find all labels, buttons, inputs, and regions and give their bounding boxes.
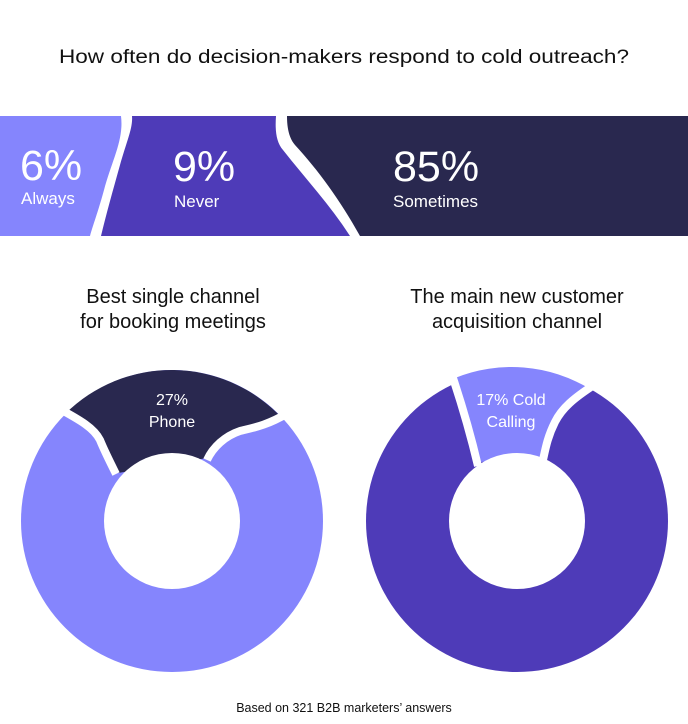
heading: main acquisition channel: acquisition channel xyxy=(432,311,602,333)
label: 85% sometimes: Sometimes xyxy=(393,192,478,211)
label: 17% cold calling: Calling xyxy=(487,414,535,431)
label: 85% sometimes: 85% xyxy=(393,143,479,191)
label: 27% phone: 27% xyxy=(156,392,188,409)
heading: best single channel: Best single channel xyxy=(86,286,260,308)
segment: cold calling 17% xyxy=(455,367,590,462)
heading: best single channel: for booking meetings xyxy=(80,311,266,333)
segment: never xyxy=(101,116,350,236)
label: 17% cold calling: 17% Cold xyxy=(476,392,546,409)
band chart: response frequency xyxy=(0,116,688,236)
donut chart: best channel xyxy=(21,370,323,672)
segment: always xyxy=(0,116,121,236)
donut chart: acquisition channel xyxy=(366,367,668,672)
footer note: Based on 321 B2B marketers’ answers xyxy=(236,701,452,715)
label: 17% cold calling xyxy=(476,392,546,431)
label: 9% never: 9% xyxy=(173,143,235,191)
segment: sometimes xyxy=(287,116,688,236)
label: 27% phone: Phone xyxy=(149,414,195,431)
segment: phone 27% xyxy=(65,370,282,473)
heading: main acquisition channel: The main new customer xyxy=(410,286,624,308)
label: 27% phone xyxy=(149,392,195,431)
title: How often do decision-makers respond to cold outreach? xyxy=(59,47,629,68)
label: 6% always: 6% xyxy=(20,142,82,190)
label: 6% always: Always xyxy=(21,189,75,208)
label: 9% never: Never xyxy=(174,192,220,211)
